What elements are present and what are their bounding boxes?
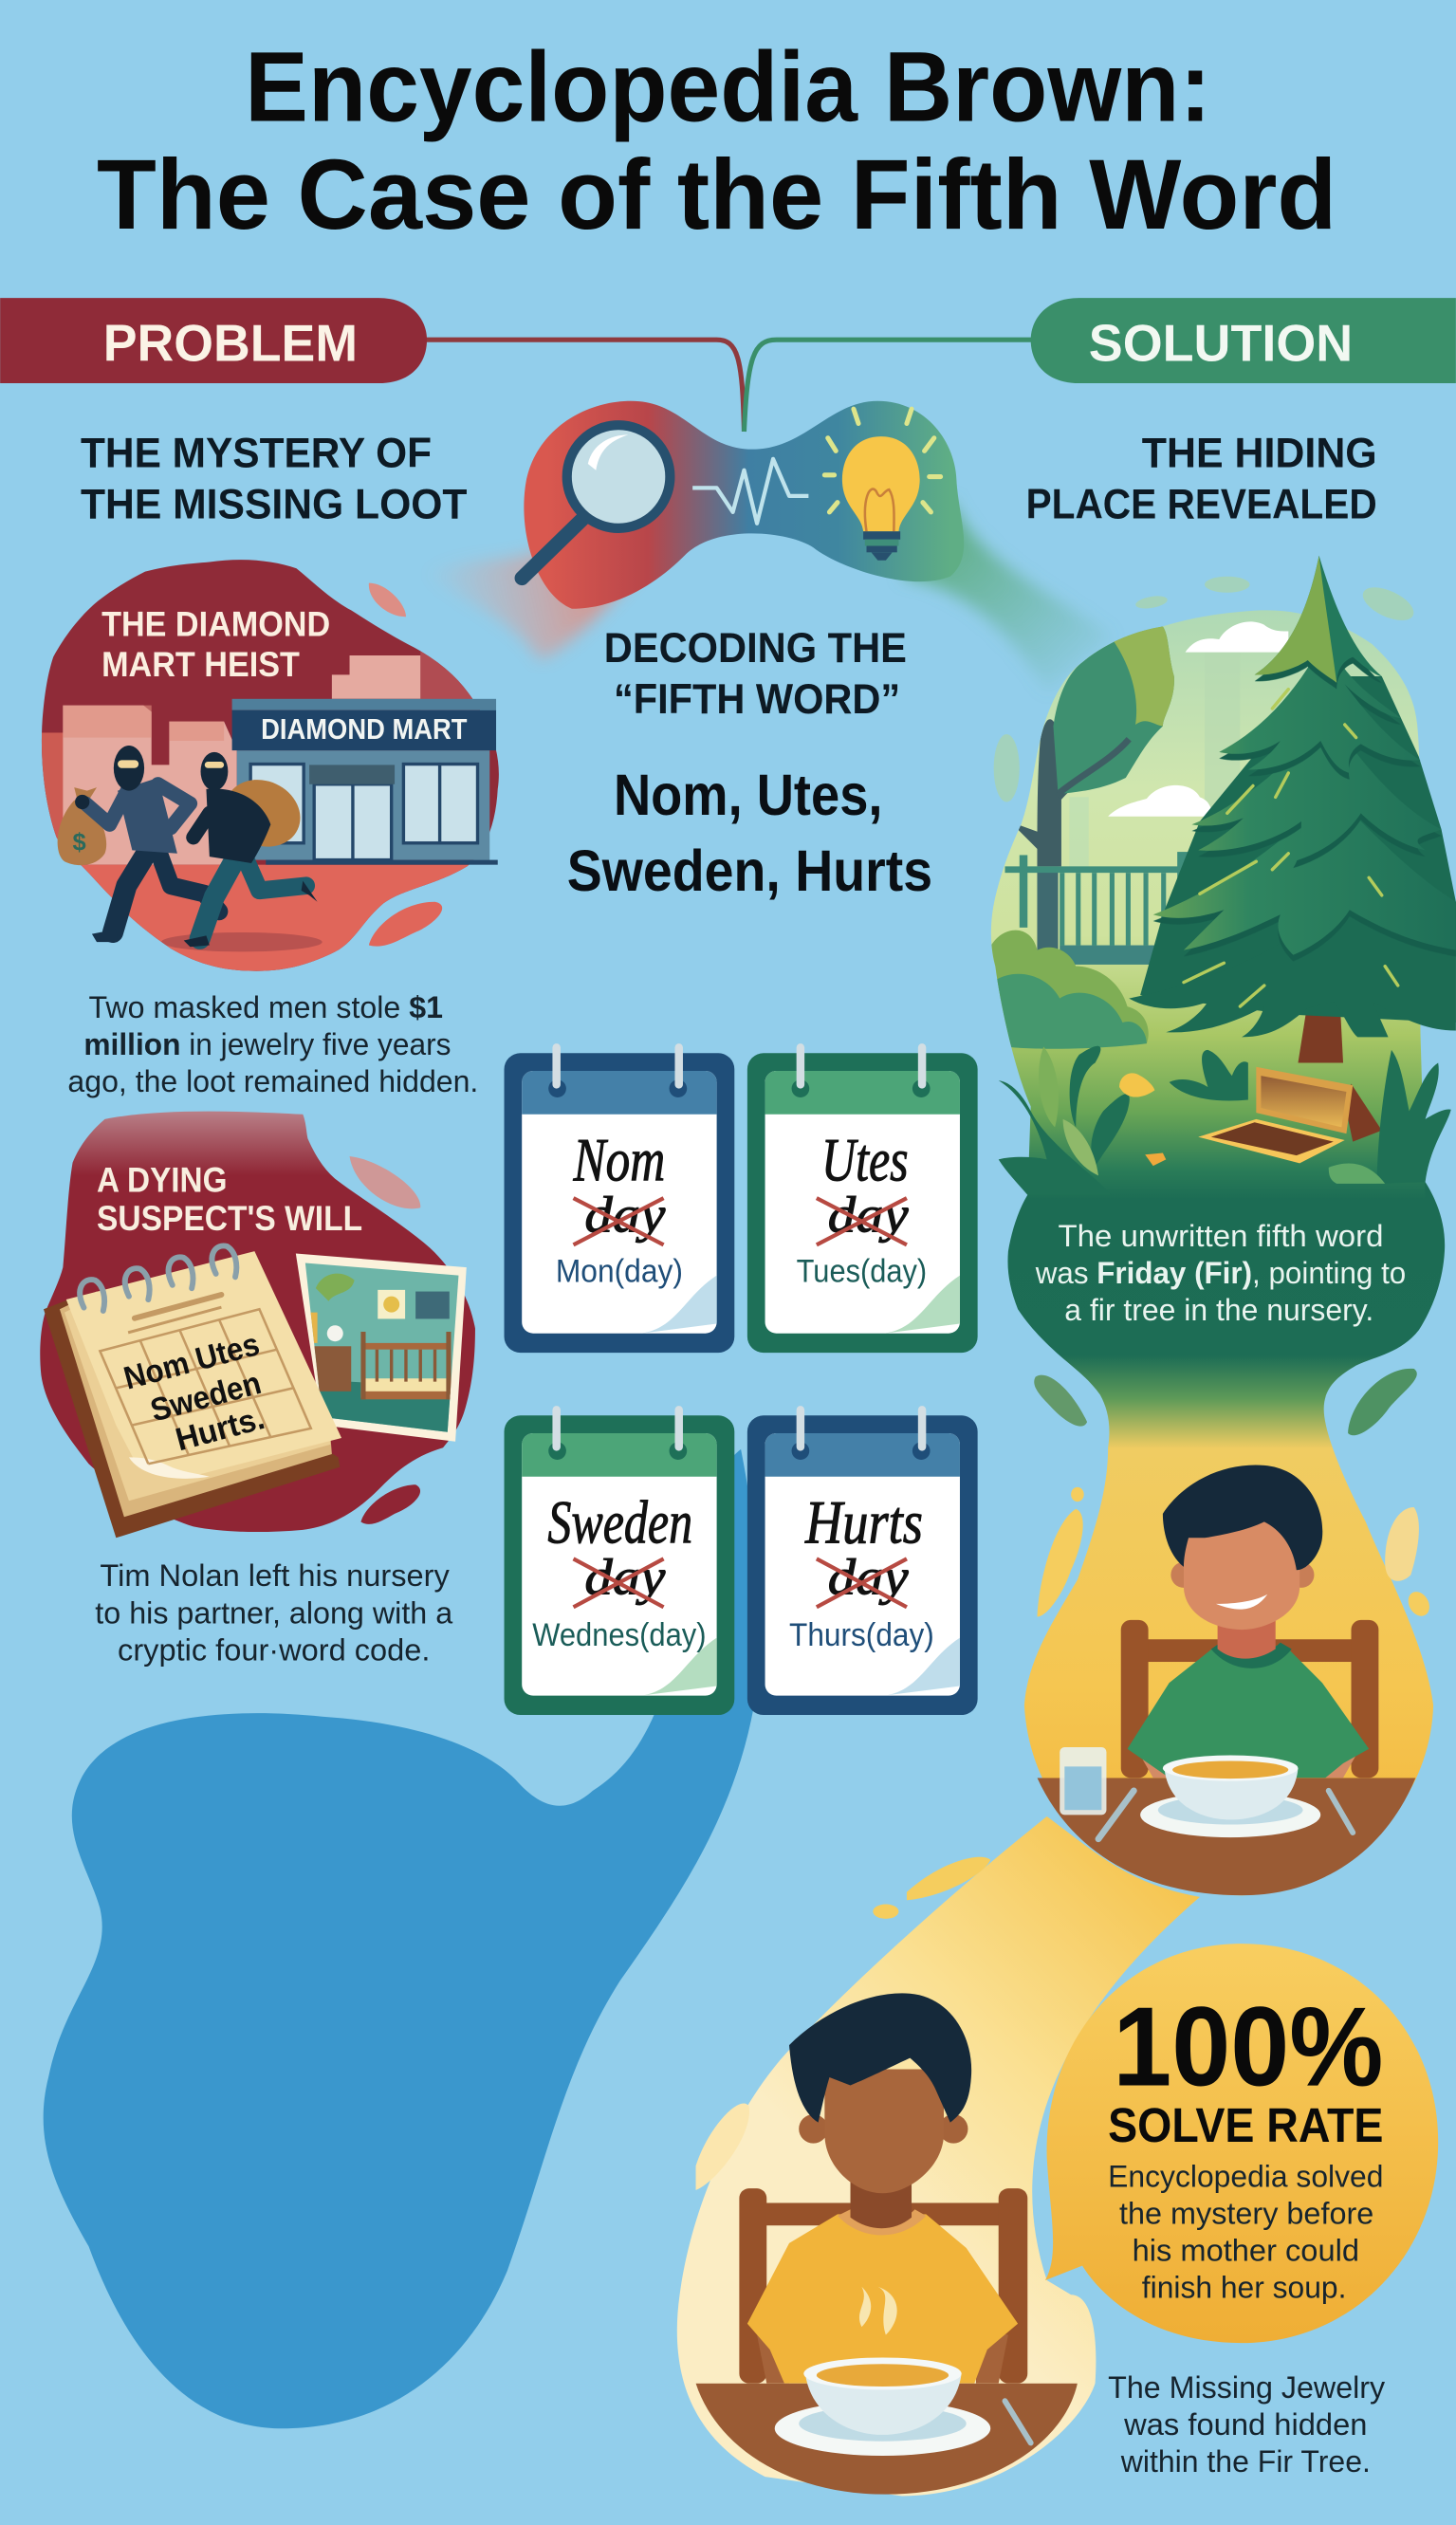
text: will summary: Tim Nolan left his nursery <box>100 1558 451 1593</box>
table <box>692 2384 1079 2499</box>
robber with money bag <box>58 746 219 942</box>
text: jewelry found: The Missing Jewelry <box>1108 2370 1386 2405</box>
heading: decoding the fifth word: DECODING THE <box>604 625 907 672</box>
calendar: Wednesday: Sweden <box>547 1488 692 1556</box>
text: heist summary: million in jewelry five years <box>83 1027 451 1061</box>
red splash <box>360 1484 420 1524</box>
title <box>97 31 1336 250</box>
calendar: Thursday: Thurs(day) <box>789 1617 934 1653</box>
title: The Case of the Fifth Word <box>97 139 1336 250</box>
skin arms <box>1140 1747 1356 1778</box>
trunk of fir tree <box>1298 1002 1343 1062</box>
yellow splashes <box>696 1857 990 2190</box>
icon: magnifying glass <box>522 425 670 578</box>
notepad with code <box>44 1245 341 1538</box>
callout: 100% solve rate: the mystery before <box>1119 2197 1373 2231</box>
text: jewelry found: was found hidden <box>1123 2407 1367 2442</box>
callout: 100% solve rate: Encyclopedia solved <box>1108 2159 1383 2193</box>
storefront: DIAMOND MART <box>261 713 468 746</box>
text: jewelry found <box>1108 2370 1386 2479</box>
central hub: magnifier to light bulb <box>422 401 1115 692</box>
chair <box>1121 1620 1378 1778</box>
floating leaves <box>994 577 1418 802</box>
table <box>1031 1778 1426 1899</box>
banner: solution: SOLUTION <box>1089 314 1353 372</box>
calendar: Monday: Mon(day) <box>556 1253 683 1289</box>
red splash <box>369 902 442 947</box>
text: will summary: to his partner, along with a <box>95 1595 452 1630</box>
yellow shirt <box>747 2214 1018 2384</box>
panel: dying suspect's will <box>40 1112 475 1538</box>
garden tree <box>1020 626 1174 866</box>
text: heist summary: Two masked men stole $1 <box>89 990 443 1024</box>
banner: problem: PROBLEM <box>103 314 358 372</box>
panel heading: MART HEIST <box>101 644 300 684</box>
foreground plants <box>999 1046 1451 1195</box>
bushes <box>989 931 1149 1049</box>
callout: 100% solve rate: 100% <box>1113 1984 1383 2110</box>
calendar: Thursday <box>747 1406 978 1715</box>
panel: diamond mart heist <box>32 560 517 978</box>
soup bowl on plate <box>1140 1755 1320 1837</box>
heading: mystery of the missing loot: THE MISSING LOOT <box>81 482 468 528</box>
illustration: boy eating soup, green shirt <box>1031 1465 1426 1899</box>
robber with sack <box>184 752 318 947</box>
head and hair <box>789 1993 971 2193</box>
calendar: Tuesday <box>747 1043 978 1353</box>
text: will summary: cryptic four·word code. <box>118 1632 430 1667</box>
big blue decorative blob <box>44 1449 759 2428</box>
heading: decoding the fifth word: “FIFTH WORD” <box>614 676 900 723</box>
illustration: boy with soup, yellow shirt <box>692 1993 1079 2499</box>
storefront <box>232 699 498 865</box>
skin arms <box>757 2327 1008 2384</box>
code words <box>567 763 932 903</box>
callout: 100% solve rate: finish her soup. <box>1142 2271 1346 2305</box>
text: heist summary: ago, the loot remained hidden. <box>67 1064 478 1098</box>
yellow stream and second scene backdrop <box>677 1816 1200 2496</box>
text: heist summary <box>67 990 478 1098</box>
text: jewelry found: within the Fir Tree. <box>1120 2444 1371 2479</box>
steam <box>859 2287 897 2335</box>
panel: green-to-yellow body <box>1007 1180 1445 1895</box>
notepad with code: Nom Utes <box>120 1326 263 1397</box>
callout: 100% solve rate <box>1045 1944 1438 2343</box>
text: fifth word explanation: The unwritten fifth word <box>1059 1219 1383 1253</box>
fir tree <box>1129 556 1456 1037</box>
panel: forest hiding place <box>989 556 1456 1200</box>
heading: hiding place revealed: THE HIDING <box>1142 430 1377 476</box>
knife and fork <box>1098 1791 1133 1839</box>
callout: 100% solve rate: SOLVE RATE <box>1108 2098 1383 2152</box>
code words: Nom, Utes, <box>614 763 882 827</box>
cloud <box>1108 785 1213 817</box>
heading: hiding place revealed: PLACE REVEALED <box>1026 482 1377 528</box>
open hidden box <box>1198 1067 1382 1163</box>
blob background <box>42 560 499 971</box>
calendar: Thursday: Hurts <box>804 1488 923 1556</box>
soup bowl on plate <box>775 2357 990 2456</box>
notepad with code: Sweden <box>147 1365 265 1428</box>
calendar: Monday: Nom <box>573 1126 665 1193</box>
title: Encyclopedia Brown: <box>245 31 1211 142</box>
panel heading <box>97 1159 362 1238</box>
forest scene background <box>991 610 1426 1200</box>
calendar: Tuesday: day <box>828 1187 910 1244</box>
connector lines <box>422 340 1034 432</box>
banner: problem <box>0 298 427 383</box>
chair <box>739 2188 1027 2384</box>
panel heading: THE DIAMOND <box>101 604 330 644</box>
pink petal <box>369 583 406 617</box>
text: will summary <box>95 1558 452 1667</box>
heading: decoding the fifth word <box>604 625 907 723</box>
calendar: Wednesday <box>505 1406 734 1715</box>
icon: heartbeat line <box>692 459 808 524</box>
banner: solution <box>1031 298 1456 383</box>
panel heading: SUSPECT'S WILL <box>97 1198 362 1238</box>
garden fence <box>1005 852 1190 965</box>
text: fifth word explanation <box>1035 1219 1406 1327</box>
callout: 100% solve rate: his mother could <box>1133 2234 1359 2268</box>
heading: mystery of the missing loot <box>81 430 468 528</box>
calendar: Wednesday: Wednes(day) <box>532 1617 707 1653</box>
heading: hiding place revealed <box>1026 430 1377 528</box>
head and hair <box>1163 1465 1322 1630</box>
calendar: Wednesday: day <box>584 1549 666 1606</box>
text: fifth word explanation: a fir tree in the nursery. <box>1064 1293 1373 1327</box>
calendar: Monday <box>505 1043 734 1353</box>
icon: light bulb <box>824 409 941 561</box>
robber with money bag: $ <box>73 829 86 856</box>
panel heading: A DYING <box>97 1159 228 1199</box>
nursery photo <box>290 1253 467 1442</box>
heading: mystery of the missing loot: THE MYSTERY OF <box>81 430 432 476</box>
panel heading <box>101 604 330 684</box>
calendar: Tuesday: Tues(day) <box>797 1253 927 1289</box>
text: fifth word explanation: was Friday (Fir), pointing to <box>1035 1256 1406 1290</box>
spoon <box>1005 2401 1031 2442</box>
green shirt <box>1128 1646 1369 1778</box>
pink petal <box>350 1156 420 1208</box>
cloud <box>1186 621 1288 653</box>
blob background <box>40 1112 475 1532</box>
code words: Sweden, Hurts <box>567 839 932 903</box>
calendar: Thursday: day <box>828 1549 910 1606</box>
notepad with code: Hurts. <box>172 1400 268 1458</box>
glass <box>1060 1747 1106 1815</box>
calendar: Tuesday: Utes <box>821 1126 909 1193</box>
decorative drips <box>1034 1369 1433 1620</box>
calendar: Monday: day <box>584 1187 666 1244</box>
